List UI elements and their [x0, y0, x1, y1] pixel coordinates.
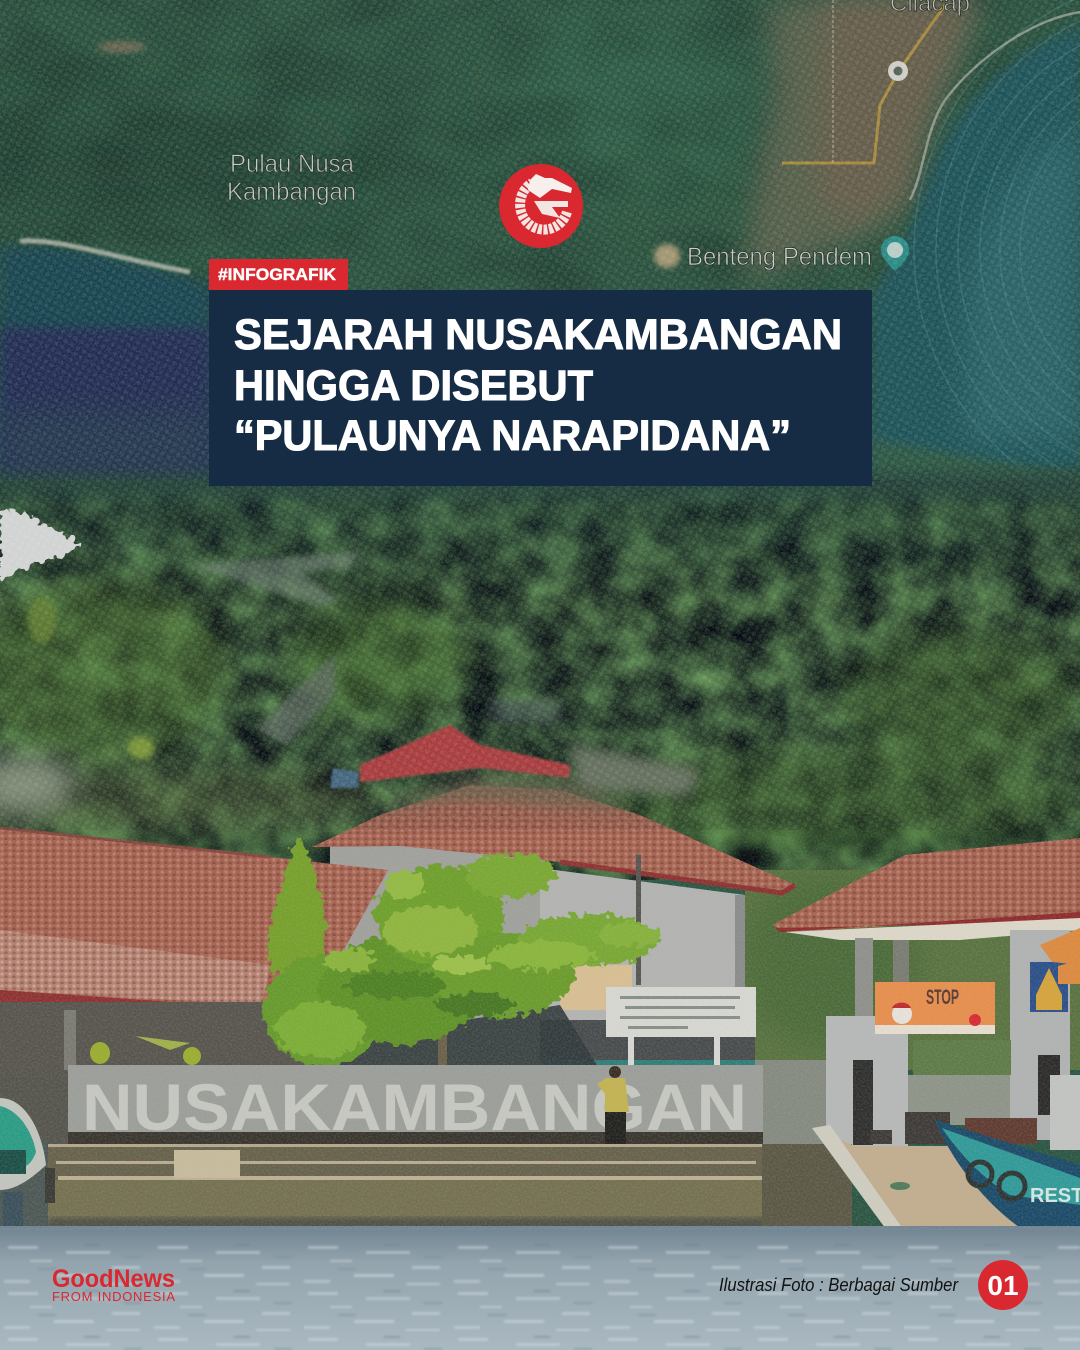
photo credit: Ilustrasi Foto : Berbagai Sumber [719, 1275, 959, 1295]
map: shoreline [910, 12, 1080, 200]
motorbikes by the gate [870, 1112, 1037, 1144]
map label: Pulau Nusa Kambangan: Kambangan [227, 178, 356, 206]
tag: #INFOGRAFIK [209, 259, 348, 290]
small shrubs [90, 1042, 110, 1064]
sea water [0, 1226, 1080, 1350]
person in yellow jacket [597, 1066, 629, 1144]
map label: Pulau Nusa Kambangan [227, 150, 356, 206]
left wall [0, 1002, 340, 1077]
concrete steps and quay [48, 1125, 1020, 1232]
small banner [560, 965, 632, 1010]
map: sea right [872, 25, 1080, 470]
stone sign: NUSAKAMBANGAN: NUSAKAMBANGAN [82, 1070, 747, 1144]
page number badge: 01 [987, 1270, 1019, 1301]
hillside: clearing [190, 552, 360, 606]
map: concentric swell rings [914, 0, 1080, 526]
stop sign [875, 982, 995, 1034]
yellow emblem and orange sign [1030, 928, 1080, 1012]
left long roof [0, 828, 388, 1012]
map: road marker [888, 61, 908, 81]
background: satellite map [0, 0, 1080, 526]
footer logo: GoodNews from Indonesia: GoodNews [52, 1265, 175, 1293]
office wall [540, 868, 745, 1070]
title text: “PULAUNYA NARAPIDANA” [234, 412, 791, 460]
background: forest hillside [0, 462, 1080, 880]
title text: HINGGA DISEBUT [234, 362, 593, 410]
map: left water [0, 246, 210, 480]
tree group [263, 835, 660, 1066]
footer logo: GoodNews from Indonesia: FROM INDONESIA [52, 1289, 175, 1304]
hillside: white cloud [0, 508, 80, 582]
footer logo: GoodNews from Indonesia [52, 1265, 175, 1304]
map pin [881, 236, 909, 271]
backdrop behind tree [330, 840, 545, 1075]
dark under-tree [340, 1005, 600, 1070]
map: brown land [745, 0, 985, 280]
map: road [782, 5, 945, 163]
stop sign: STOP [926, 986, 959, 1009]
tag: #INFOGRAFIK: #INFOGRAFIK [218, 265, 337, 284]
photo: port building [0, 775, 1080, 1230]
notice board [606, 987, 756, 1067]
pavilion columns [855, 938, 873, 1018]
jetty ramp [812, 1128, 1020, 1232]
map label: Pulau Nusa Kambangan: Pulau Nusa [230, 150, 354, 178]
map label: Benteng Pendem: Benteng Pendem [687, 243, 872, 271]
back roof [312, 785, 795, 893]
green boat left [0, 1098, 55, 1232]
title text: SEJARAH NUSAKAMBANGAN [234, 311, 842, 359]
title panel [209, 290, 872, 486]
halftone weave overlay [0, 0, 1080, 830]
hillside: sunlit canopy patches [0, 580, 1080, 850]
hillside: distant red roofs [330, 700, 700, 795]
blue boat right [935, 1120, 1080, 1240]
right pavilion roof [772, 838, 1080, 932]
logo: red round emblem [499, 164, 583, 248]
title text [234, 311, 842, 460]
gate post [826, 1016, 908, 1146]
page number badge [978, 1260, 1028, 1310]
